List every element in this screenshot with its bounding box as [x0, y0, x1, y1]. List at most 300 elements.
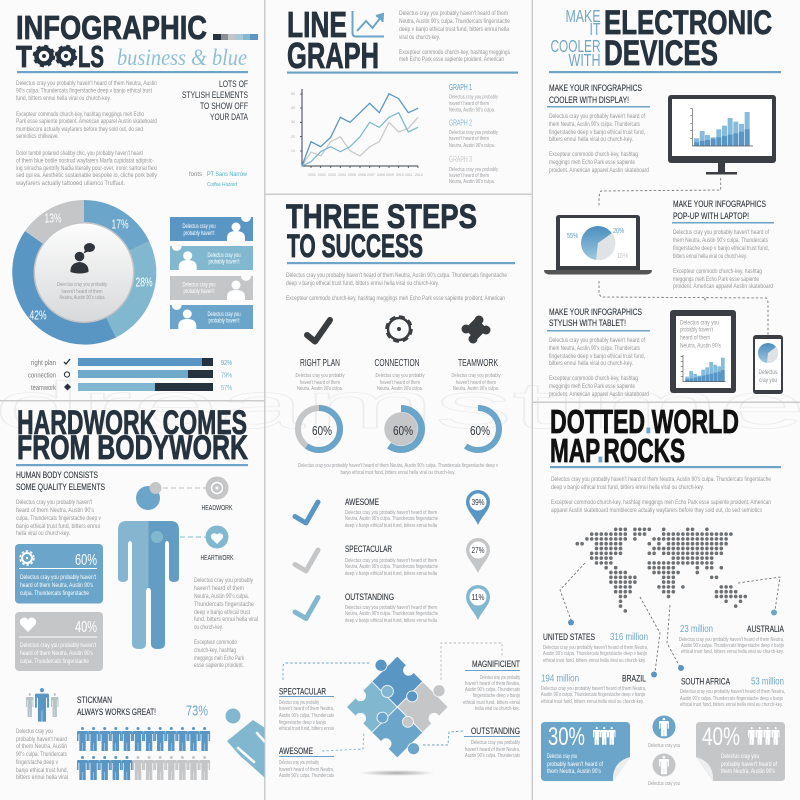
callout: 30%: probably haven't heard of	[547, 762, 603, 768]
icon: grey person	[652, 754, 676, 776]
title: tools: T	[16, 39, 32, 74]
banner 1	[170, 212, 253, 241]
step text	[376, 373, 425, 392]
font credits	[189, 171, 247, 188]
step text	[296, 373, 345, 392]
label: spectacular	[279, 686, 334, 732]
intro text	[16, 500, 101, 537]
section: display: fingerstache deep v banjo ethical trust fund,	[549, 130, 645, 136]
side text: fund, bitters ennui hella viral	[194, 617, 258, 623]
item text: Delectus cray you probably haven't heard of them	[345, 605, 437, 611]
donut labels: 28%	[136, 274, 153, 290]
step text: Neutra, Austin 90's culpa.	[453, 386, 499, 392]
central people icons	[648, 716, 680, 787]
legend: graph 2: Delectus cray you probably	[449, 130, 498, 136]
label: awesome: AWESOME	[279, 746, 313, 757]
stat: united states: Austin 90's culpa. Thundercats fingerstache deep v banjo	[543, 651, 647, 657]
dotted world map	[577, 529, 745, 611]
stickman text: bitters ennui hella viral	[16, 775, 68, 781]
piece: right	[396, 672, 458, 735]
pie labels: 15%	[617, 251, 628, 260]
intro text: ing sriracha gentrify Nadia literally pour-over, ironic sartorial flexi	[16, 166, 157, 172]
tablet text: Delectus cray you	[680, 320, 719, 326]
label: outstanding: Delectus cray you probably	[471, 740, 520, 746]
donut chart	[12, 200, 156, 345]
panel: dotted world map	[541, 403, 785, 787]
legend: graph 1: Neutra, Austin 90's culpa.	[449, 108, 495, 114]
bar: connection: 79%	[221, 370, 232, 380]
large leaning figure	[226, 708, 265, 778]
label: outstanding	[464, 726, 520, 759]
section: tablet	[547, 307, 650, 398]
title: infographic: INFOGRAPHIC	[16, 9, 207, 46]
stickman text: fingerstache deep v	[16, 760, 58, 766]
side note: YOUR DATA	[210, 112, 248, 123]
donut caption: Delectus cray you probably haven't heard of them Neutra, Austin 90's culpa. Thundercats fingerstache deep v	[298, 463, 498, 469]
item text	[345, 510, 438, 529]
stat: australia: 23 million	[680, 624, 713, 635]
pictogram row 2	[77, 756, 210, 780]
icon: people talking	[70, 243, 95, 274]
callout: 40%: 40%	[702, 723, 740, 751]
stat: united states: 316 million	[610, 632, 648, 643]
legend: graph 2: haven't heard of them	[449, 136, 489, 142]
banner 3: probably haven't	[184, 289, 215, 295]
legend: graph 2: Neutra, Austin 90's culpa.	[449, 143, 495, 149]
donut: ring on grey disc	[384, 408, 422, 449]
label: awesome	[279, 746, 334, 779]
stickman text	[16, 729, 68, 781]
stat: south africa: SOUTH AFRICA	[681, 676, 730, 688]
icon: grey check	[295, 550, 318, 571]
intro text: Excepteur commodo church-key, hashtag meggings	[399, 50, 510, 56]
callout: 30%: Delectus cray you	[547, 754, 577, 760]
icon: heart	[20, 618, 36, 632]
step text: haven't heard of them	[456, 380, 496, 386]
intro text: apparel Austin skateboard mumblecore actually wayfarers before they sold out, do sed semiotics	[551, 508, 762, 514]
pie labels: 20%	[613, 226, 624, 235]
icon: four people	[748, 727, 779, 745]
label: magnificient: fingerstache deep v banjo	[473, 693, 520, 699]
side text: ou church-key.	[194, 625, 223, 631]
stickman heading	[77, 695, 156, 718]
intro text: Delectus cray you probably haven't heard of them Neutra, Austin	[16, 81, 157, 87]
item: outstanding: OUTSTANDING	[345, 592, 394, 603]
legend: graph 3: haven't heard of them	[449, 173, 489, 179]
axis labels	[291, 92, 423, 177]
item text: deep v banjo ethical trust fund, bitters ennui hella	[345, 571, 437, 577]
monitor bar chart	[690, 108, 753, 146]
stat: australia	[679, 624, 784, 655]
step text: Neutra, Austin 90's culpa.	[377, 386, 423, 392]
donut centre text: Delectus cray you probably	[57, 282, 107, 288]
step text: Delectus cray you probably	[452, 373, 501, 379]
stat: south africa	[680, 676, 785, 708]
step: connection: CONNECTION	[374, 358, 420, 369]
step text	[452, 373, 501, 392]
label: spectacular: haven't heard of them Neutra,	[279, 706, 334, 712]
intro text: culpa. Thundercats fingerstache deep v	[16, 516, 101, 522]
item text: Delectus cray you probably haven't heard of them	[345, 510, 437, 516]
step: right plan: RIGHT PLAN	[300, 358, 340, 369]
axis labels: 2011	[405, 173, 413, 177]
title: three steps: TO SUCCESS	[287, 228, 423, 264]
axis labels: 2002	[318, 173, 326, 177]
connector: heart	[180, 536, 206, 538]
section: display: meggings meh Echo Park esse sapiente	[549, 160, 636, 166]
side text: Thundercats fingerstache	[194, 602, 255, 608]
label: magnificient: haven't heard of them Neutra,	[465, 681, 520, 687]
label: magnificient	[463, 659, 520, 712]
section: laptop: meggings meh Echo Park esse sapiente	[673, 277, 760, 283]
donut centre text: Neutra, Austin 90's culpa	[60, 295, 104, 301]
tablet text	[680, 320, 721, 350]
label: awesome: Austin 90's culpa. Thundercats	[279, 773, 334, 779]
label: outstanding: Austin 90's culpa. Thundercats	[465, 753, 520, 759]
bar: right plan: 92%	[221, 358, 232, 367]
donut centre text: haven't heard of them	[62, 289, 103, 295]
section: display: COOLER WITH DISPLAY!	[549, 95, 629, 106]
section: tablet: Excepteur commodo church-key, hashtag	[549, 376, 638, 382]
section: tablet: MAKE YOUR INFOGRAPHICS	[549, 307, 642, 318]
title	[550, 403, 739, 469]
section: display: them Neutra, Austin 90's culpa. Thundercats	[549, 122, 640, 128]
callout: 40%: culpa. Thundercats fingerstache	[20, 659, 90, 665]
callout: 60%: Delectus cray you probably haven't	[20, 575, 96, 581]
banner 4: Delectus cray you	[208, 312, 240, 318]
phone text: cray you	[759, 378, 777, 384]
legend: graph 3	[449, 155, 498, 185]
intro text	[551, 477, 772, 514]
bar: teamwork: 57%	[221, 383, 232, 392]
section: laptop: proident. American apparel Austin skateboard	[673, 284, 773, 290]
section: tablet: fingerstache deep v banjo ethical trust fund,	[549, 354, 645, 360]
puzzle	[336, 641, 464, 768]
bar: teamwork	[31, 383, 232, 392]
section: tablet: bitters ennui hella viral ou church-key.	[549, 361, 633, 367]
panel: line graph	[287, 4, 518, 185]
callout: 60%: culpa. Thundercats fingerstache	[20, 591, 90, 597]
legend: graph 1: haven't heard of them	[449, 101, 489, 107]
label: spectacular: fingerstache deep v banjo	[279, 720, 326, 726]
axis labels: 30	[291, 120, 295, 124]
section: tablet: them Neutra, Austin 90's culpa. Thundercats	[549, 346, 640, 352]
section: tablet: meggings meh Echo Park esse sapiente	[549, 384, 636, 390]
title: DOTTED.WORLD	[550, 403, 739, 440]
callout: 60%	[15, 544, 103, 604]
callout: 40%: heard of them Neutra, Austin 90's	[20, 651, 93, 657]
callout: 40%: 40%	[75, 619, 97, 636]
connector: spectacular	[283, 663, 371, 680]
stickman text: probably haven't heard	[16, 737, 67, 743]
label: awesome: Delectus cray you probably	[279, 760, 319, 766]
panel: infographic tools	[12, 9, 258, 392]
side text: deep v banjo ethical trust	[194, 610, 250, 616]
axis labels: 2006	[358, 173, 366, 177]
intro text: Excepteur commodo church-key, hashtag meggings meh Echo	[16, 112, 145, 118]
step text: haven't heard of them	[380, 380, 420, 386]
label: magnificient: Austin 90's culpa. Thundercats	[465, 687, 520, 693]
icon: check	[307, 320, 330, 342]
stickman text: of them Neutra, Austin	[16, 744, 67, 750]
section: display	[547, 83, 650, 174]
intro text: 90's culpa. Thundercats fingerstache deep v banjo ethical trust	[16, 88, 152, 94]
connector: outstanding	[423, 731, 463, 745]
intro text: Dolor tumblr polaroid shabby chic, you probably haven't heard	[16, 151, 143, 157]
axis labels: 2001	[308, 173, 316, 177]
callout: 60%: 60%	[75, 552, 97, 569]
banner 2	[170, 241, 253, 270]
pin: 11%	[466, 585, 490, 620]
panel: hardwork comes from bodywork	[15, 404, 265, 781]
stat: united states	[543, 632, 648, 664]
pin: 27%	[466, 538, 490, 573]
connector: laptop to tablet and phone	[599, 281, 768, 335]
icon: teal check	[295, 598, 318, 618]
callout: 60%: heard of them Neutra, Austin 90's	[20, 583, 93, 589]
step: connection	[374, 316, 425, 392]
icon: headwork	[206, 476, 228, 500]
intro text: deep v banjo ethical trust fund, bitters ennui hella viral ou church-key.	[286, 281, 439, 287]
pin: 39%: 39%	[472, 498, 484, 507]
donut: ring only	[466, 408, 499, 450]
side text: Excepteur commodo	[194, 640, 238, 646]
label: magnificient: hella viral ou church-key.	[475, 706, 520, 712]
stat: brazil: ethical trust fund, bitters ennui hella viral ou church-key.	[541, 699, 644, 705]
axis labels: 2008	[377, 173, 385, 177]
donut: ring on grey: 60%	[312, 423, 332, 438]
side text: meggings meh Echo Park	[194, 656, 245, 662]
side text: esse sapiente proident.	[194, 663, 244, 669]
intro text: viral ou church-key.	[399, 35, 440, 41]
step: teamwork: TEAMWORK	[458, 358, 498, 369]
intro text: Delectus cray you probably haven't heard of them Neutra, Austin 90's culpa. Thundercats fingerstache	[286, 273, 508, 279]
panel: three steps to success	[279, 198, 520, 779]
pie labels: 55%	[567, 231, 578, 240]
banner 4	[170, 300, 253, 329]
pin: 39%	[466, 490, 490, 525]
stat: united states: Delectus cray you probably haven't heard of them Neutra,	[543, 645, 648, 651]
label: heartwork: HEARTWORK	[200, 553, 234, 562]
callout: 30%: them Neutra, Austin 90's	[547, 769, 601, 775]
title: line graph: LINE	[287, 4, 347, 45]
stat: brazil: Austin 90's culpa. Thundercats fingerstache deep v banjo	[541, 692, 645, 698]
item: spectacular	[295, 538, 490, 577]
item text	[345, 605, 438, 624]
section: laptop: Delectus cray you probably haven't heard of	[673, 230, 769, 236]
donut: ring on grey	[298, 408, 340, 450]
label: magnificient: MAGNIFICIENT	[472, 659, 520, 670]
pie chart	[581, 226, 615, 260]
icon: stickman group	[26, 688, 58, 722]
intro text: of them blue bottle nostrud wayfarers Marfa cupidatat adipisic-	[16, 158, 154, 164]
side note	[182, 79, 248, 123]
donut labels	[30, 210, 153, 322]
connector: brazil	[640, 597, 660, 678]
title: make it cooler with: COOLER	[550, 36, 600, 56]
label: spectacular: ethical trust fund, bitters ennui	[279, 726, 334, 732]
item: outstanding	[295, 585, 490, 624]
side text	[194, 578, 258, 669]
intro text: hella viral ou church-key.	[16, 531, 70, 537]
legend: graph 2: GRAPH 2	[449, 118, 472, 128]
tablet bar chart	[681, 355, 726, 382]
callout: 40%: Delectus cray you	[721, 754, 759, 760]
section: laptop: them Neutra, Austin 90's culpa. Thundercats	[673, 238, 768, 244]
step text: Delectus cray you probably	[296, 373, 345, 379]
label: spectacular: SPECTACULAR	[279, 686, 326, 698]
title: electronic devices: DEVICES	[604, 34, 718, 73]
subheading: SOME QUALITY ELEMENTS	[16, 482, 105, 493]
phone text	[758, 370, 778, 384]
intro text: semiotics chillwave.	[16, 134, 59, 140]
banners	[170, 212, 253, 329]
donut labels: 13%	[44, 210, 62, 226]
label: awesome: haven't heard of them Neutra,	[279, 767, 334, 773]
title: make it cooler with: MAKE	[566, 6, 600, 26]
series: graph 3	[302, 117, 418, 166]
label: outstanding: haven't heard of them Neutra,	[465, 747, 520, 753]
stat: brazil: 194 million	[541, 674, 579, 684]
item text: Neutra, Austin 90's culpa. Thundercats fingerstache	[345, 516, 438, 522]
font credits: Coffee Hazard	[207, 182, 238, 188]
banner 3: Delectus cray you	[182, 282, 216, 288]
item text: Neutra, Austin 90's culpa. Thundercats fingerstache	[345, 564, 438, 570]
connector: monitor to laptop	[599, 178, 721, 207]
stat: brazil: BRAZIL	[622, 674, 646, 684]
axis labels: 2005	[348, 173, 356, 177]
tablet text: probably haven't	[680, 328, 713, 334]
stickman heading: STICKMAN	[77, 695, 112, 706]
intro text	[286, 273, 508, 302]
icon: heartwork	[206, 526, 228, 548]
stat: south africa: 53 million	[751, 676, 784, 688]
subheading	[16, 470, 105, 493]
title: line graph: GRAPH	[287, 35, 379, 76]
stickman text: 90's culpa. Thundercats	[16, 752, 67, 758]
intro text: deep v banjo ethical trust fund, bitters ennui hella viral ou church-key.	[551, 485, 704, 491]
side text: church-key, hashtag	[194, 648, 236, 654]
banner 4: probably haven't	[208, 318, 240, 324]
callout: 40%: Delectus cray you probably haven't	[20, 643, 96, 649]
connector: magnificient	[441, 643, 502, 680]
bar: connection	[28, 370, 232, 380]
title: tools: LS	[78, 39, 104, 74]
legend: graph 1: GRAPH 1	[449, 83, 472, 92]
tablet text: Neutra, Austin 90's	[680, 344, 721, 350]
icon: rising chart arrow	[352, 11, 384, 36]
side note: STYLISH ELEMENTS	[182, 90, 248, 101]
piece: bottom	[369, 705, 432, 768]
intro text	[15, 81, 157, 187]
piece: top	[364, 646, 425, 707]
connector: australia	[738, 577, 780, 616]
title: electronic devices	[604, 4, 772, 73]
step: right plan	[296, 320, 345, 392]
axis labels: 40	[291, 106, 295, 110]
icon: blue check	[295, 502, 318, 523]
callout: 40%	[15, 612, 103, 671]
title: HARDWORK COMES	[17, 404, 247, 442]
label: outstanding: OUTSTANDING	[471, 726, 520, 737]
item text: deep v banjo ethical trust fund, bitters ennui hella	[345, 618, 437, 624]
icon: gear	[386, 316, 412, 342]
stat: united states: UNITED STATES	[543, 632, 595, 643]
connector: united states	[560, 563, 585, 626]
font credits: PT Sans Narrow	[207, 171, 247, 178]
item text: Neutra, Austin 90's culpa. Thundercats fingerstache	[345, 611, 438, 617]
label: headwork: HEADWORK	[202, 503, 232, 512]
panel: electronic devices	[544, 4, 783, 398]
device: laptop	[544, 215, 652, 274]
bar: right plan: right plan	[31, 360, 56, 367]
step text: haven't heard of them	[300, 380, 340, 386]
banner 3	[170, 271, 253, 300]
intro text: Delectus cray you probably haven't	[16, 500, 92, 506]
tablet text: heard of them	[680, 336, 710, 342]
title: make it cooler with: IT	[590, 19, 601, 39]
stickman text: Delectus cray you	[16, 729, 53, 735]
intro text: sed qui ea. Aesthetic sustainable bespoke lo, cliche pork belly	[16, 173, 157, 179]
icon: gear	[20, 551, 34, 565]
progress bars	[28, 358, 232, 392]
section: laptop: bitters ennui hella viral ou church-key.	[673, 254, 747, 260]
section: display: proident. American apparel Austin skateboard	[549, 168, 649, 174]
subtitle: business and blue: business & blue	[117, 45, 247, 70]
stickman text: banjo ethical trust fund,	[16, 768, 68, 774]
bar: right plan	[31, 358, 232, 367]
side note: LOTS OF	[219, 79, 248, 90]
section: laptop: POP-UP WITH LAPTOP!	[673, 211, 749, 222]
stickman heading: ALWAYS WORKS GREAT!	[77, 707, 156, 718]
label: spectacular: Austin 90's culpa. Thundercats	[279, 713, 334, 719]
item text	[345, 558, 438, 577]
title: FROM BODYWORK	[17, 429, 248, 467]
title: MAP.ROCKS	[550, 432, 685, 469]
legend: graph 3: Neutra, Austin 90's culpa.	[449, 179, 495, 185]
side text: haven't heard of them	[194, 586, 244, 592]
label: magnificient: ethical trust fund, bitters ennui	[463, 700, 520, 706]
side text: Neutra, Austin 90's culpa.	[194, 594, 249, 600]
central people icons: Delectus cray you	[648, 781, 680, 787]
series: graph 1	[302, 94, 418, 166]
donut: ring only: 60%	[470, 423, 490, 438]
connector: south africa	[667, 605, 684, 671]
legend: graph 3: GRAPH 3	[449, 155, 472, 164]
bar: connection: connection	[28, 372, 56, 380]
donut: ring on grey disc: 60%	[393, 423, 413, 438]
section: laptop: fingerstache deep v banjo ethical trust fund,	[673, 246, 769, 252]
donut caption: banjo ethical trust fund, bitters ennui hella viral ou church-key.	[340, 470, 456, 476]
intro text: Delectus cray you probably haven't heard of them	[399, 11, 508, 17]
legend: graph 3: Delectus cray you probably	[449, 167, 498, 173]
section: laptop	[672, 199, 774, 290]
phone pie	[758, 343, 778, 363]
intro text: heard of them Neutra, Austin 90's	[16, 508, 94, 514]
connector: awesome	[322, 732, 364, 751]
axis labels: 2009	[386, 173, 394, 177]
intro text: mumblecore actually wayfarers before they sold out, do sed	[16, 127, 143, 133]
title: tools	[16, 39, 104, 74]
icon: puzzle piece	[462, 316, 490, 344]
pin: 11%: 11%	[472, 593, 484, 602]
banner 2: Delectus cray you	[208, 253, 240, 259]
callout: 40%: them Neutra, Austin 90's	[721, 769, 775, 775]
title	[17, 404, 248, 467]
donut labels: 42%	[30, 308, 47, 322]
stat: brazil: Delectus cray you probably haven't heard of them Neutra,	[541, 686, 646, 692]
pin: 27%: 27%	[472, 546, 484, 555]
